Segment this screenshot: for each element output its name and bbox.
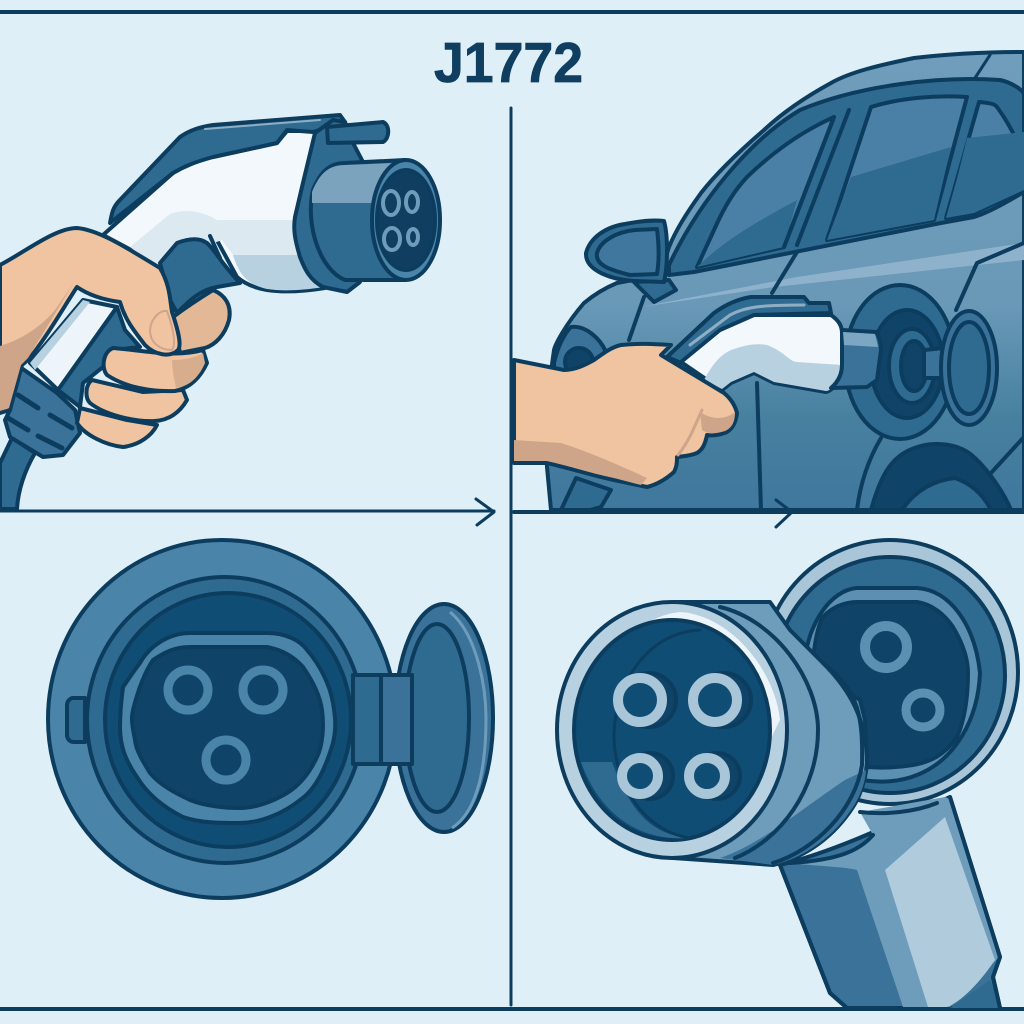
outer ring [48, 540, 396, 898]
icon: connector handle [5, 115, 345, 457]
cable [0, 438, 35, 509]
car body [546, 52, 1024, 510]
windows [697, 117, 834, 267]
icon: connector head [294, 120, 440, 292]
connector arrow and baseline [514, 500, 1024, 527]
icon: hand [0, 228, 230, 447]
inlet behind [762, 540, 1018, 804]
handle [780, 797, 1000, 1008]
rear wheel arch [871, 444, 1011, 510]
charge port [845, 285, 997, 439]
front wheel arch [554, 327, 606, 380]
panel: vehicle inlet with open flap [48, 540, 493, 898]
door lines [629, 243, 1024, 510]
connector face [557, 602, 787, 858]
socket [120, 633, 335, 823]
latch tab [67, 698, 85, 742]
flap [395, 604, 493, 832]
hand [514, 344, 737, 487]
panel: hand holding connector [0, 115, 440, 509]
window frame [669, 79, 1024, 275]
hinge [353, 675, 412, 764]
plug [667, 297, 881, 392]
low cable [561, 478, 611, 510]
panel: connector face and inlet [557, 540, 1018, 1008]
title: J1772 [434, 31, 583, 95]
divider: vertical and horizontal axes [0, 108, 511, 1005]
barrel [673, 602, 867, 865]
panel: plugging into the car [514, 52, 1024, 527]
mirror [586, 221, 676, 302]
